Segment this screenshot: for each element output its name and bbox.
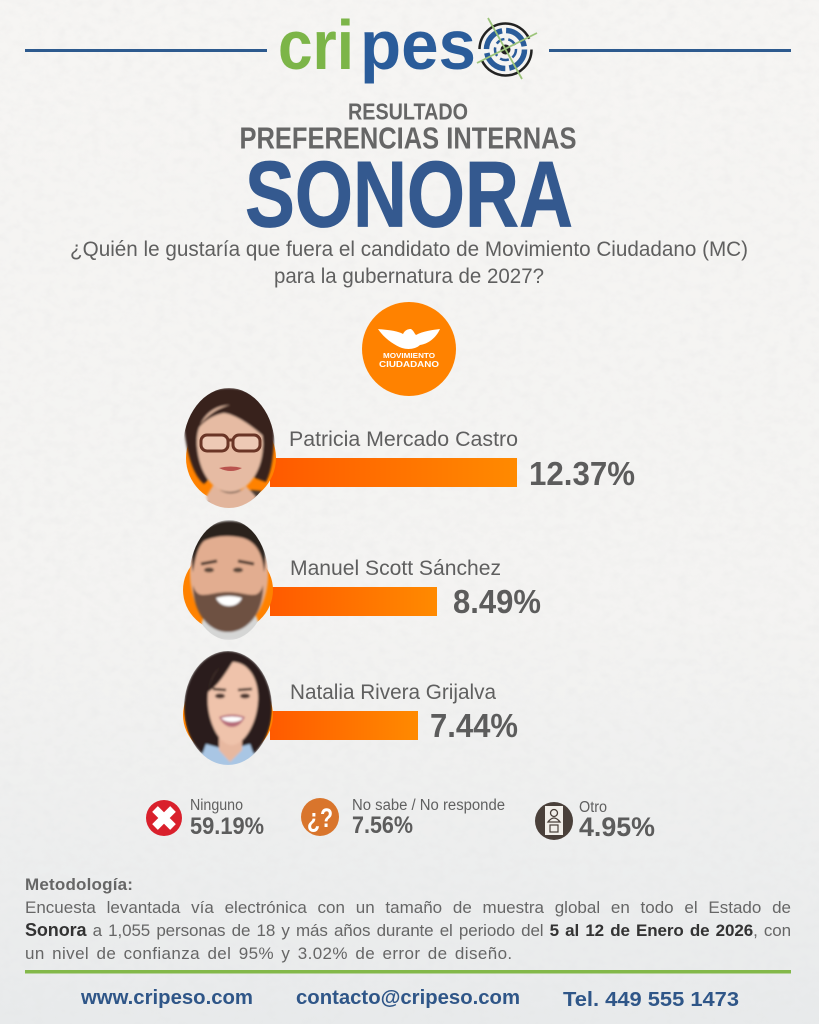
- icon: question marks: [301, 798, 339, 836]
- divider green: [25, 970, 791, 974]
- title: preferencias internas: PREFERENCIAS INTERNAS: [240, 122, 576, 156]
- footer: email: contacto@cripeso.com: [296, 987, 520, 1009]
- logo: cripeso: [278, 6, 537, 84]
- candidate 3: Natalia Rivera Grijalva: [183, 651, 518, 766]
- legend: ninguno: Ninguno: [190, 797, 243, 814]
- footer: website: www.cripeso.com: [80, 987, 253, 1009]
- portrait: [183, 651, 273, 766]
- candidate 1: Patricia Mercado Castro: [184, 388, 635, 510]
- logo wordmark green: cri: [278, 6, 354, 84]
- methodology text: Encuesta levantada vía electrónica con un tamaño de muestra global en todo el Estado de: [25, 898, 791, 917]
- header rule left: [25, 49, 267, 52]
- legend: no sabe / no responde: [301, 797, 505, 839]
- icon: question marks: ¿?: [307, 803, 333, 833]
- legend: no sabe / no responde: No sabe / No responde: [352, 797, 505, 814]
- methodology text: Sonora a 1,055 personas de 18 y más años durante el periodo del 5 al 12 de Enero de 2026, con: [25, 920, 791, 940]
- portrait: [183, 521, 273, 640]
- bar: [270, 587, 437, 616]
- title: sonora: SONORA: [245, 142, 573, 246]
- party logo: Movimiento Ciudadano: CIUDADANO: [379, 359, 439, 369]
- value: 12.37%: [529, 455, 635, 492]
- methodology text: un nivel de confianza del 95% y 3.02% de error de diseño.: [25, 944, 513, 963]
- bar: [270, 711, 418, 740]
- methodology text: Metodología:: [25, 875, 133, 894]
- methodology text: [25, 875, 791, 963]
- party logo: Movimiento Ciudadano: [362, 302, 456, 396]
- legend: otro: [535, 799, 655, 842]
- icon: ballot: [535, 802, 573, 840]
- legend: no sabe / no responde: 7.56%: [352, 812, 413, 839]
- name: Patricia Mercado Castro: [289, 427, 518, 451]
- legend: otro: Otro: [579, 799, 607, 816]
- party logo: Movimiento Ciudadano: MOVIMIENTO: [383, 353, 436, 360]
- question: [70, 238, 748, 288]
- legend: ninguno: [146, 797, 264, 840]
- logo wordmark blue: pes: [360, 6, 476, 84]
- question: para la gubernatura de 2027?: [274, 265, 544, 288]
- value: 8.49%: [453, 583, 541, 620]
- portrait: [184, 388, 276, 510]
- glasses: [201, 435, 260, 451]
- logo target icon: [477, 18, 537, 79]
- legend: otro: 4.95%: [579, 812, 655, 842]
- name: Manuel Scott Sánchez: [290, 556, 501, 580]
- title: resultado: RESULTADO: [348, 98, 468, 124]
- bar: [270, 458, 517, 487]
- candidate 2: Manuel Scott Sánchez: [183, 521, 541, 640]
- header rule right: [549, 49, 791, 52]
- value: 7.44%: [430, 707, 518, 744]
- name: Natalia Rivera Grijalva: [290, 680, 496, 704]
- footer: phone: Tel. 449 555 1473: [563, 989, 739, 1011]
- icon: red x: [146, 800, 182, 836]
- question: ¿Quién le gustaría que fuera el candidato de Movimiento Ciudadano (MC): [70, 238, 748, 261]
- legend: ninguno: 59.19%: [190, 813, 264, 840]
